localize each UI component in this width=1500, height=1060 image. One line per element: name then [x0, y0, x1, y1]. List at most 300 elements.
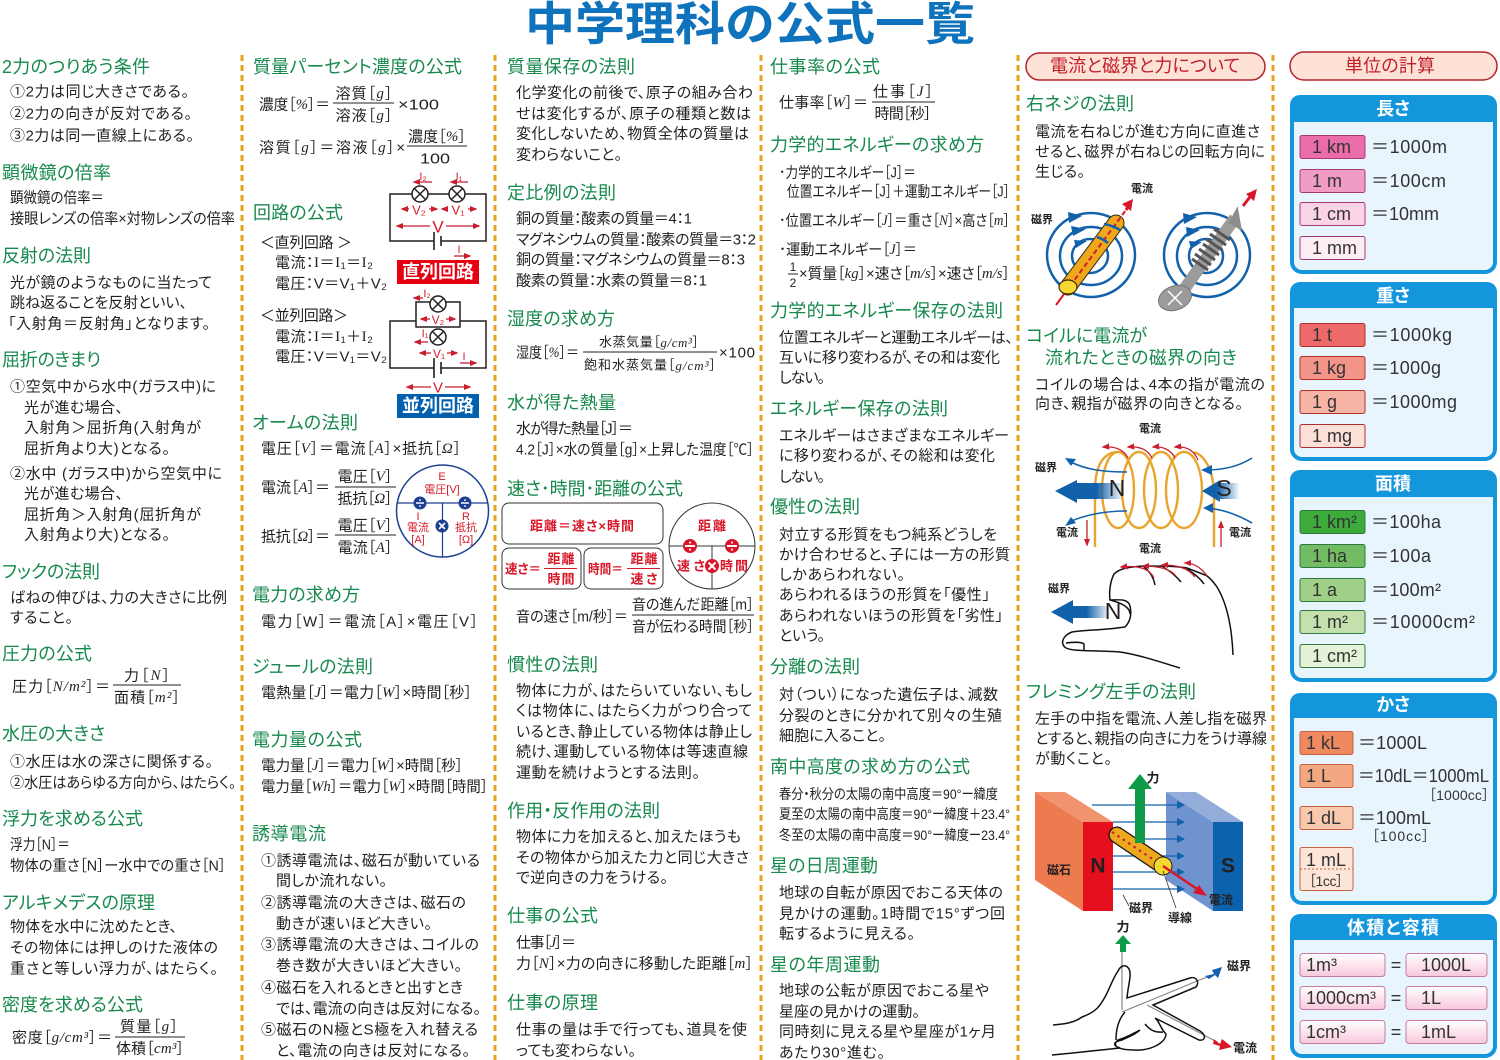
text: 慣性の法則: 続け、運動している物体は等速直線: [516, 742, 748, 760]
text: 誘導電流: 間しか流れない。: [276, 872, 387, 890]
text: 水圧の大きさ: [10, 754, 236, 792]
diagram: current-carrying wire with field rings: [1031, 181, 1153, 305]
formula: 仕事率: 時間［秒］: [874, 106, 932, 122]
diagram: Fleming left hand: [1052, 920, 1257, 1055]
diagram: parallel circuit: I: [462, 351, 466, 363]
panel: 面積: ＝10000cm²: [1371, 612, 1475, 632]
diagram: parallel circuit: [390, 288, 486, 396]
diagram: Fleming left hand: 電流: [1233, 1040, 1257, 1055]
diagram: Ohm circle: 電流: [407, 521, 429, 534]
panel: 面積: 1 km²: [1312, 512, 1357, 532]
heading: フックの法則: フックの法則: [2, 562, 100, 582]
text: フックの法則: すること。: [10, 610, 73, 626]
formula: 音の速さ: 音の速さ［m/秒］＝: [516, 608, 628, 626]
formula: 濃度: 溶液［g］: [336, 108, 392, 124]
text: 屈折のきまり: 屈折角＞入射角(屈折角が: [24, 506, 201, 524]
formula: 仕事率: [779, 84, 935, 122]
text: 力学的エネルギー: 2: [790, 276, 797, 290]
column 6: unit conversions: [1290, 52, 1497, 1056]
formula: 密度: 質量［g］: [120, 1018, 178, 1036]
text: エネルギー保存の法則: に移り変わるが、その総和は変化: [779, 448, 995, 464]
heading: フレミング左手の法則: フレミング左手の法則: [1026, 682, 1196, 702]
panel: 面積: 面積: [1375, 474, 1411, 494]
panel: 体積と容積: =: [1391, 988, 1401, 1008]
diagram: magnets and conductor: 電流: [1209, 892, 1233, 907]
heading: ジュールの法則: ジュールの法則: [252, 657, 373, 677]
formula box: 速さ: 時間: [548, 572, 574, 586]
heading: 力学的エネルギー保存の法則: 力学的エネルギー保存の法則: [770, 301, 1003, 321]
text: 定比例の法則: 銅の質量：マグネシウムの質量＝8：3: [516, 250, 745, 268]
diagram: Ohm circle: [396, 465, 488, 557]
text: 屈折のきまり: [10, 378, 222, 544]
panel: 面積: 1 m²: [1312, 612, 1348, 632]
text: 仕事の公式: [516, 934, 753, 972]
diagram: series circuit: I₂: [419, 171, 427, 183]
text: 定比例の法則: [516, 210, 756, 290]
panel: 面積: 1 a: [1312, 580, 1338, 600]
panel: 面積: ＝100ha: [1371, 512, 1442, 532]
formula: 音の速さ: 音の進んだ距離［m］: [632, 596, 754, 614]
text: 質量保存の法則: 変わらないこと。: [516, 146, 622, 164]
panel: かさ: かさ: [1376, 695, 1410, 715]
text: アルキメデスの原理: その物体には押しのけた液体の: [10, 940, 218, 956]
panel: かさ: 1 mL: [1306, 850, 1346, 870]
text: コイルの場合: 向き、親指が磁界の向きとなる。: [1035, 396, 1243, 412]
heading: 誘導電流: 誘導電流: [252, 824, 326, 844]
text: 屈折のきまり: ②水中 (ガラス中)から空気中に: [10, 466, 222, 482]
diagram: Fleming left hand: 力: [1116, 920, 1130, 934]
text: 水が得た熱量: [516, 420, 754, 458]
text: 定比例の法則: マグネシウムの質量：酸素の質量＝3：2: [516, 230, 756, 248]
diagram: coil magnetic field: 電流: [1229, 525, 1251, 539]
panel: 体積と容積: 1m³: [1306, 955, 1337, 975]
formula: 湿度: 水蒸気量［g/cm³］: [599, 334, 699, 350]
text: 屈折のきまり: 光が進む場合、: [24, 486, 123, 502]
text: 直列回路: ＜直列回路 ＞: [260, 234, 352, 252]
panel: 体積と容積: [1290, 914, 1497, 1056]
text: 2力のつりあう条件: [10, 84, 194, 144]
text: 右ネジの法則: せると、磁界が右ねじの回転方向に: [1035, 144, 1265, 160]
text: 浮力を求める公式: 物体の重さ［N］ー水中での重さ［N］: [10, 858, 226, 874]
heading: 星の日周運動: 星の日周運動: [770, 856, 878, 876]
text: フレミング左手の法則: [1035, 710, 1267, 768]
diagram: coil magnetic field: S: [1216, 475, 1232, 501]
formula: 濃度: 濃度［%］: [408, 128, 466, 146]
formula: オームの法則: 電圧［V］＝電流［A］×抵抗［Ω］: [261, 440, 461, 458]
text: 南中高度: 春分・秋分の太陽の南中高度＝90°ー緯度: [779, 786, 998, 802]
text: 顕微鏡の倍率: 顕微鏡の倍率＝: [10, 190, 104, 206]
formula: 圧力: 力［N］: [124, 668, 170, 684]
text: 力学的エネルギー: ×質量［kg］×速さ［m/s］×速さ［m/s］: [799, 264, 1010, 282]
text: 分離の法則: 分裂のときに分かれて別々の生殖: [779, 708, 1002, 724]
panel: 長さ: 1 mm: [1312, 238, 1357, 258]
text: 屈折のきまり: 入射角より大)となる。: [24, 526, 170, 544]
formula: オームの法則: 電圧［V］: [338, 468, 392, 486]
text: 2力のつりあう条件: ③2力は同一直線上にある。: [10, 128, 194, 144]
panel: 体積と容積: 1000L: [1421, 955, 1471, 975]
formula: 圧力: 圧力［N/m²］＝: [12, 678, 110, 696]
heading: 仕事率の公式: 仕事率の公式: [770, 57, 880, 77]
section pill: 単位の計算: 単位の計算: [1345, 56, 1435, 76]
panel: 重さ: 1 mg: [1312, 426, 1352, 446]
diagram: coil magnetic field: 電流: [1139, 421, 1161, 435]
text: 作用・反作用の法則: その物体から加えた力と同じ大きさ: [516, 850, 749, 866]
text: アルキメデスの原理: 重さと等しい浮力が、はたらく。: [10, 960, 218, 978]
formula: 密度: [12, 1018, 185, 1058]
text: 星の年周運動: 同時刻に見える星や星座が1ヶ月: [779, 1024, 996, 1040]
diagram: Ohm circle: [Ω]: [459, 534, 473, 546]
text: 分離の法則: 対（つい）になった遺伝子は、減数: [779, 686, 998, 704]
text: 直列回路: [260, 234, 387, 292]
diagram: series circuit: I: [457, 244, 461, 256]
text: エネルギー保存の法則: [779, 426, 1009, 486]
formula: 湿度: 湿度［%］＝: [516, 344, 579, 362]
panel: 体積と容積: 体積と容積: [1347, 918, 1439, 938]
text: 優性の法則: [779, 526, 1010, 644]
diagram: Ohm circle: E: [438, 471, 446, 483]
heading: 慣性の法則: 慣性の法則: [507, 655, 598, 675]
heading: 作用・反作用の法則: 作用・反作用の法則: [507, 801, 660, 821]
diagram: magnets and conductor: 磁界: [1129, 901, 1153, 915]
panel: かさ: 1 kL: [1306, 733, 1340, 753]
formula: 圧力: [12, 668, 181, 706]
text: 屈折のきまり: 屈折角より大)となる。: [24, 440, 170, 458]
text: 優性の法則: という。: [779, 628, 825, 644]
text: 南中高度: 夏至の太陽の南中高度＝90°ー緯度＋23.4°: [779, 806, 1010, 822]
panel: かさ: 1 L: [1306, 766, 1331, 786]
diagram: coil magnetic field: [1035, 421, 1252, 547]
panel: 面積: 1 cm²: [1312, 646, 1357, 666]
text: 仕事の公式: 力［N］×力の向きに移動した距離［m］: [516, 956, 753, 972]
text: 仕事の原理: っても変わらない。: [516, 1042, 636, 1060]
text: 水が得た熱量: 水が得た熱量［J］＝: [516, 420, 633, 438]
text: 優性の法則: あらわれないほうの形質を「劣性」: [779, 606, 1003, 624]
text: 力学的エネルギー保存の法則: 互いに移り変わるが、その和は変化: [779, 350, 1000, 366]
text: 仕事の原理: 仕事の量は手で行っても、道具を使: [516, 1022, 747, 1038]
heading: 定比例の法則: 定比例の法則: [507, 183, 616, 203]
formula: 濃度: 100: [420, 150, 450, 168]
text: 作用・反作用の法則: で逆向きの力をうける。: [516, 870, 668, 886]
text: 誘導電流: ①誘導電流は、磁石が動いている: [261, 852, 480, 870]
diagram: speed circle: [669, 503, 755, 589]
badge: 並列回路: 並列回路: [402, 396, 474, 416]
text: 誘導電流: 巻き数が大きいほど大きい。: [276, 958, 462, 974]
heading: 質量パーセント濃度の公式: 質量パーセント濃度の公式: [253, 57, 462, 77]
formula: オームの法則: 抵抗［Ω］＝: [261, 528, 330, 546]
diagram: right hand grip with N pole: [1048, 541, 1233, 668]
panel: 長さ: ＝1000m: [1371, 137, 1447, 157]
panel: 重さ: [1290, 282, 1497, 459]
heading: 質量保存の法則: 質量保存の法則: [507, 57, 635, 77]
formula box: 時間: 距離: [630, 552, 658, 566]
panel: 重さ: ＝1000kg: [1371, 325, 1452, 345]
formula: 湿度: 飽和水蒸気量［g/cm³］: [584, 358, 716, 372]
heading: コイルに電流が流れたときの磁界の向き: コイルに電流が: [1026, 326, 1147, 346]
formula: 濃度: 溶質［g］: [336, 84, 392, 102]
text: フックの法則: [10, 590, 227, 626]
text: 星の日周運動: 転するように見える。: [779, 926, 915, 942]
text: 質量保存の法則: せは変化するが、原子の種類と数は: [516, 106, 751, 122]
text: コイルの場合: [1035, 376, 1265, 412]
formula: オームの法則: [261, 440, 461, 556]
text: 力学的エネルギー: [779, 164, 1010, 290]
text: 右ネジの法則: 生じる。: [1035, 164, 1085, 180]
text: 仕事の原理: [516, 1022, 747, 1060]
text: 作用・反作用の法則: 物体に力を加えると、加えたほうも: [516, 828, 741, 846]
text: 慣性の法則: いるとき、静止している物体は静止し: [516, 724, 752, 740]
heading: 電力の求め方: 電力の求め方: [252, 585, 360, 605]
diagram: speed circle: 速さ: [677, 558, 705, 574]
diagram: Ohm circle: R: [462, 511, 470, 523]
column 1: forces and light: [2, 57, 236, 1058]
text: 優性の法則: しかあらわれない。: [779, 566, 905, 584]
panel: かさ: ［1cc］: [1309, 873, 1343, 889]
panel: かさ: [1290, 693, 1497, 903]
diagram: series circuit: V₁: [451, 202, 465, 218]
diagram: parallel circuit: V₂: [432, 313, 445, 327]
diagram: parallel circuit: V: [433, 380, 443, 396]
text: 屈折のきまり: 光が進む場合、: [24, 400, 123, 416]
panel: 体積と容積: =: [1391, 1022, 1401, 1042]
column 3: chemistry, motion and work: [502, 57, 756, 1060]
text: 質量保存の法則: [516, 84, 753, 164]
text: 直列回路: 電圧：V＝V₁＋V₂: [275, 276, 387, 292]
panel: 長さ: 1 km: [1312, 137, 1351, 157]
diagram: right hand grip with N pole: N: [1105, 598, 1121, 624]
heading: 力学的エネルギーの求め方: 力学的エネルギーの求め方: [770, 135, 984, 155]
heading: 水が得た熱量: 水が得た熱量: [507, 393, 616, 413]
diagram: coil magnetic field: 磁界: [1035, 461, 1057, 474]
diagram: coil magnetic field: 電流: [1056, 525, 1078, 539]
heading: 密度を求める公式: 密度を求める公式: [2, 995, 143, 1015]
panel: 長さ: [1290, 95, 1497, 272]
heading: 星の年周運動: 星の年周運動: [770, 955, 880, 975]
badge: 直列回路: 直列回路: [402, 262, 474, 282]
text: 分離の法則: 細胞に入ること。: [779, 728, 886, 744]
panel: 重さ: 重さ: [1376, 286, 1410, 306]
heading: 顕微鏡の倍率: 顕微鏡の倍率: [2, 163, 111, 183]
text: 力学的エネルギー: 1: [790, 260, 797, 274]
text: 星の年周運動: 地球の公転が原因でおこる星や: [779, 982, 989, 1000]
text: 慣性の法則: 物体に力が、はたらいていない、もし: [516, 682, 752, 700]
panel: 重さ: 1 kg: [1312, 358, 1346, 378]
text: 仕事の公式: 仕事［J］＝: [516, 934, 576, 952]
diagram: coil magnetic field: N: [1109, 475, 1125, 501]
diagram: parallel circuit: V₁: [433, 347, 445, 361]
text: 優性の法則: かけ合わせると、子には一方の形質: [779, 546, 1010, 564]
text: 並列回路: 電流：I＝I₁＋I₂: [275, 328, 373, 346]
panel: かさ: ［1000cc］: [1429, 787, 1489, 803]
text: 水圧の大きさ: ①水圧は水の深さに関係する。: [10, 754, 213, 770]
formula: 濃度: 濃度［%］＝: [259, 96, 330, 114]
formula: オームの法則: 電圧［V］: [338, 518, 392, 534]
formula: 圧力: 面積［m²］: [114, 690, 180, 706]
text: 誘導電流: ⑤磁石のN極とS極を入れ替える: [261, 1022, 478, 1038]
panel: 重さ: ＝1000mg: [1371, 392, 1457, 412]
diagram: speed circle: 時間: [720, 558, 748, 574]
text: 反射の法則: 「入射角＝反射角」となります。: [8, 316, 210, 332]
heading: 反射の法則: 反射の法則: [2, 246, 91, 266]
text: 星の日周運動: [779, 884, 1005, 942]
text: 作用・反作用の法則: [516, 828, 749, 886]
text: 星の日周運動: 見かけの運動。1時間で15°ずつ回: [779, 906, 1005, 922]
text: 力学的エネルギー保存の法則: しない。: [779, 370, 825, 386]
formula: 濃度: 溶質［g］＝溶液［g］×: [259, 138, 405, 156]
formula: 密度: 体積［cm³］: [116, 1040, 184, 1058]
text: 優性の法則: 対立する形質をもつ純系どうしを: [779, 526, 997, 544]
text: 力学的エネルギー保存の法則: [779, 330, 1013, 386]
panel: 重さ: ＝1000g: [1371, 358, 1441, 378]
diagram: current-carrying wire with field rings: 磁界: [1031, 213, 1053, 226]
text: アルキメデスの原理: 物体を水中に沈めたとき、: [10, 918, 177, 936]
formula box: 距離: [502, 503, 663, 544]
diagram: series circuit: V: [432, 218, 444, 236]
formula: 密度: 密度［g/cm³］＝: [12, 1030, 112, 1046]
text: 南中高度: 冬至の太陽の南中高度＝90°ー緯度ー23.4°: [779, 827, 1010, 843]
panel: かさ: 1 dL: [1306, 808, 1341, 828]
panel: かさ: ＝1000L: [1358, 733, 1427, 753]
text: 星の年周運動: 星座の見かけの運動。: [779, 1004, 920, 1020]
heading: コイルに電流が流れたときの磁界の向き: 流れたときの磁界の向き: [1045, 348, 1237, 368]
panel: 重さ: 1 t: [1312, 325, 1332, 345]
text: 電力量: 電力量［J］＝電力［W］×時間［秒］: [261, 758, 463, 774]
text: 並列回路: 電圧：V＝V₁＝V₂: [275, 348, 387, 366]
formula box: 速さ: [502, 548, 581, 589]
formula: 仕事率: 仕事［J］: [873, 84, 933, 100]
text: 電熱量: 電熱量［J］＝電力［W］×時間［秒］: [261, 684, 472, 702]
text: フックの法則: ばねの伸びは、力の大きさに比例: [10, 590, 227, 606]
diagram: magnets and conductor: S: [1221, 854, 1235, 878]
panel: 面積: ＝100m²: [1371, 580, 1441, 600]
text: 星の日周運動: 地球の自転が原因でおこる天体の: [779, 884, 1003, 902]
text: 電力量: 電力量［Wh］＝電力［W］×時間［時間］: [261, 778, 488, 796]
heading: コイルに電流が流れたときの磁界の向き: [1026, 326, 1237, 368]
formula: 音の速さ: [516, 596, 754, 636]
panel: 重さ: 1 g: [1312, 392, 1337, 412]
diagram: right hand grip with N pole: 電流: [1139, 541, 1161, 555]
text: 右ネジの法則: [1035, 124, 1265, 180]
heading: 仕事の公式: 仕事の公式: [507, 906, 598, 926]
formula box: 時間: 速さ: [630, 572, 658, 586]
text: 水が得た熱量: 4.2［J］×水の質量［g］×上昇した温度［℃］: [516, 440, 754, 458]
text: 誘導電流: ③誘導電流の大きさは、コイルの: [261, 936, 479, 954]
diagram: parallel circuit: I₁: [422, 328, 429, 340]
text: 浮力を求める公式: 浮力［N］＝: [10, 836, 70, 854]
panel: 長さ: ＝100cm: [1371, 171, 1446, 191]
text: コイルの場合: コイルの場合は、4本の指が電流の: [1035, 376, 1265, 394]
text: 反射の法則: [8, 274, 212, 332]
column 5: current, magnetism and force: [1026, 53, 1267, 1055]
panel: 長さ: 1 m: [1312, 171, 1342, 191]
text: 慣性の法則: くは物体に、はたらく力がつり合って: [516, 702, 752, 720]
heading: オームの法則: オームの法則: [252, 413, 358, 433]
formula: オームの法則: 抵抗［Ω］: [338, 490, 392, 508]
panel: かさ: ［100cc］: [1372, 828, 1429, 844]
text: フレミング左手の法則: が動くこと。: [1035, 750, 1112, 768]
heading: 速さ・時間・距離の公式: 速さ･時間･距離の公式: [507, 479, 683, 499]
panel: 面積: 1 ha: [1312, 546, 1348, 566]
text: 反射の法則: 光が鏡のようなものに当たって: [10, 274, 212, 292]
text: 浮力を求める公式: [10, 836, 226, 874]
heading: 2力のつりあう条件: 2力のつりあう条件: [2, 57, 150, 77]
text: 力学的エネルギー: 位置エネルギー［J］＋運動エネルギー［J］: [787, 184, 1010, 200]
text: 優性の法則: あらわれるほうの形質を「優性」: [779, 586, 990, 604]
text: 誘導電流: [261, 852, 481, 1060]
formula box: 速さ: 速さ＝: [505, 562, 541, 576]
panel: かさ: ＝100mL: [1358, 808, 1431, 828]
diagram: right hand grip with N pole: 磁界: [1048, 582, 1070, 595]
heading: 湿度の求め方: 湿度の求め方: [507, 309, 615, 329]
text: 誘導電流: 動きが速いほど大きい。: [276, 916, 432, 932]
heading: アルキメデスの原理: アルキメデスの原理: [2, 893, 155, 913]
text: 屈折のきまり: 入射角＞屈折角(入射角が: [24, 420, 201, 436]
text: 定比例の法則: 銅の質量：酸素の質量＝4：1: [516, 210, 692, 228]
formula: 濃度: [259, 84, 467, 168]
text: エネルギー保存の法則: しない。: [779, 468, 825, 486]
formula box: 速さ: 距離: [548, 552, 574, 566]
formula: 仕事率: 仕事率［W］＝: [779, 94, 868, 112]
text: 2力のつりあう条件: ①2力は同じ大きさである。: [10, 84, 189, 100]
text: 慣性の法則: [516, 682, 752, 782]
text: 並列回路: ＜並列回路＞: [260, 308, 348, 324]
text: 星の年周運動: [779, 982, 996, 1060]
section pill: 電流と磁界と力について: 電流と磁界と力について: [1050, 56, 1240, 76]
diagram: speed circle: 距離: [698, 518, 726, 534]
text: 誘導電流: では、電流の向きは反対になる。: [276, 1000, 481, 1018]
panel: 体積と容積: 1cm³: [1306, 1022, 1346, 1042]
text: 質量保存の法則: 変化しないため、物質全体の質量は: [516, 124, 749, 142]
heading: 右ネジの法則: 右ネジの法則: [1026, 94, 1134, 114]
text: 慣性の法則: 運動を続けようとする法則。: [516, 764, 700, 782]
diagram: Fleming left hand: 磁界: [1227, 959, 1251, 973]
panel: 面積: ＝100a: [1371, 546, 1432, 566]
text: 質量保存の法則: 化学変化の前後で、原子の組み合わ: [516, 84, 753, 102]
diagram: magnets and conductor: 磁石: [1047, 863, 1071, 877]
heading: 電力量の公式: 電力量の公式: [252, 730, 362, 750]
text: 力学的エネルギー保存の法則: 位置エネルギーと運動エネルギーは、: [779, 330, 1013, 346]
diagram: magnets and conductor: [1035, 770, 1243, 925]
panel: 長さ: 1 cm: [1312, 204, 1351, 224]
formula box: 時間: [584, 548, 663, 589]
text: 力学的エネルギー: ･運動エネルギー［J］＝: [779, 242, 917, 258]
text: 力学的エネルギー: ･位置エネルギー［J］＝重さ［N］×高さ［m］: [779, 212, 1010, 230]
formula: 湿度: [516, 334, 755, 372]
diagram: Ohm circle: 抵抗: [455, 520, 477, 534]
text: 力学的エネルギー: ･力学的エネルギー［J］＝: [779, 164, 916, 182]
panel: 体積と容積: 1L: [1421, 988, 1441, 1008]
text: 反射の法則: 跳ね返ることを反射といい、: [10, 294, 187, 312]
heading: 優性の法則: 優性の法則: [770, 497, 860, 517]
heading: 仕事の原理: 仕事の原理: [507, 993, 598, 1013]
formula: オームの法則: 電流［A］＝: [261, 480, 330, 496]
formula: オームの法則: 電流［A］: [338, 540, 392, 556]
formula box: 距離: 距離＝速さ×時間: [530, 518, 634, 534]
panel: 体積と容積: 1000cm³: [1306, 988, 1376, 1008]
text: 顕微鏡の倍率: 接眼レンズの倍率×対物レンズの倍率: [10, 210, 235, 228]
text: 右ネジの法則: 電流を右ねじが進む方向に直進さ: [1035, 124, 1260, 140]
text: 水圧の大きさ: ②水圧はあらゆる方向から、はたらく。: [10, 774, 236, 792]
text: 屈折のきまり: ①空気中から水中(ガラス中)に: [10, 378, 216, 396]
text: 並列回路: [260, 308, 387, 366]
text: 顕微鏡の倍率: [10, 190, 235, 228]
text: 誘導電流: ④磁石を入れるときと出すとき: [261, 980, 463, 996]
section pill: 電流と磁界と力について: [1026, 53, 1265, 80]
panel: 体積と容積: 1mL: [1421, 1022, 1456, 1042]
diagram: current-carrying wire with field rings: 電流: [1131, 181, 1153, 195]
panel: 体積と容積: =: [1391, 955, 1401, 975]
section pill: 単位の計算: [1290, 52, 1497, 80]
text: 電力: 電力［W］＝電流［A］×電圧［V］: [261, 614, 478, 630]
